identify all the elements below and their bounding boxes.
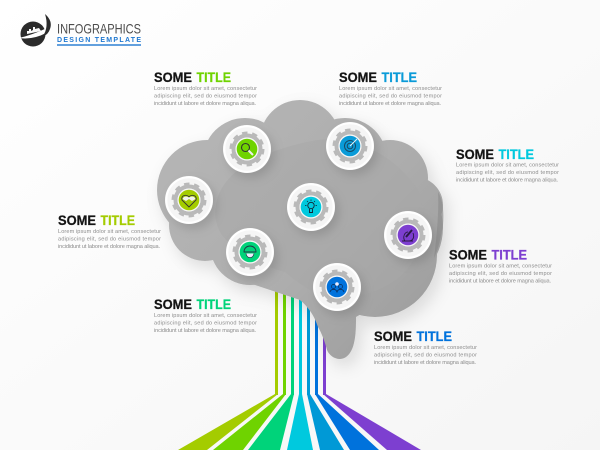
text block: bottom right: adipiscing elit, sed do eiusmod tempor xyxy=(374,352,477,358)
coloured stripes trunk xyxy=(178,285,421,450)
text block: left xyxy=(58,212,161,250)
text block: bottom left: adipiscing elit, sed do eiusmod tempor xyxy=(154,320,257,326)
text block: right lower: incididunt ut labore et dolore magna aliqua. xyxy=(449,278,551,284)
logo xyxy=(19,14,141,46)
node: target xyxy=(326,122,374,170)
brain right edge shade xyxy=(434,192,443,258)
text block: right upper: incididunt ut labore et dolore magna aliqua. xyxy=(456,178,558,184)
text block: top left: TITLE xyxy=(196,69,231,85)
text block: bottom right: Lorem ipsum dolor sit amet, consectetur xyxy=(374,345,477,351)
text block: right lower: TITLE xyxy=(492,246,527,262)
text block: top left xyxy=(154,69,257,107)
text block: left: incididunt ut labore et dolore magna aliqua. xyxy=(58,244,160,250)
text block: bottom right: TITLE xyxy=(416,328,452,344)
node: search xyxy=(223,125,271,173)
text block: top right: adipiscing elit, sed do eiusmod tempor xyxy=(339,94,442,100)
text block: right upper: Lorem ipsum dolor sit amet, consectetur xyxy=(456,162,559,168)
brain inner shaded lobe xyxy=(215,139,424,300)
node: microscope xyxy=(384,211,432,259)
logo heading: INFOGRAPHICS xyxy=(57,20,141,36)
text block: bottom left: Lorem ipsum dolor sit amet, consectetur xyxy=(154,313,257,319)
text block: top left: SOME xyxy=(154,69,192,85)
text block: top left: Lorem ipsum dolor sit amet, consectetur xyxy=(154,86,257,92)
text block: left: adipiscing elit, sed do eiusmod tempor xyxy=(58,236,161,242)
node: helmet xyxy=(226,228,274,276)
text block: top right xyxy=(339,69,442,107)
text block: bottom right: SOME xyxy=(374,328,412,344)
text block: top right: incididunt ut labore et dolore magna aliqua. xyxy=(339,101,441,107)
text block: left: TITLE xyxy=(100,212,135,228)
text block: right upper: adipiscing elit, sed do eiusmod tempor xyxy=(456,170,559,176)
text block: right lower xyxy=(449,246,552,284)
text block: bottom left xyxy=(154,296,257,334)
node: team xyxy=(313,263,361,311)
text block: bottom right xyxy=(374,328,477,366)
brain shape xyxy=(157,100,443,359)
text block: right lower: SOME xyxy=(449,246,487,262)
text block: right upper xyxy=(456,146,559,184)
text block: top left: incididunt ut labore et dolore magna aliqua. xyxy=(154,101,256,107)
node: heart xyxy=(165,176,213,224)
text block: bottom right: incididunt ut labore et dolore magna aliqua. xyxy=(374,360,476,366)
text block: right upper: SOME xyxy=(456,146,494,162)
text block: top right: SOME xyxy=(339,69,377,85)
text block: right upper: TITLE xyxy=(498,146,534,162)
text block: right lower: Lorem ipsum dolor sit amet, consectetur xyxy=(449,264,552,270)
text block: left: SOME xyxy=(58,212,96,228)
text block: right lower: adipiscing elit, sed do eiusmod tempor xyxy=(449,271,552,277)
text block: bottom left: SOME xyxy=(154,296,192,312)
text block: bottom left: TITLE xyxy=(196,296,231,312)
text block: bottom left: incididunt ut labore et dolore magna aliqua. xyxy=(154,328,256,334)
text block: top right: Lorem ipsum dolor sit amet, consectetur xyxy=(339,86,442,92)
logo subheading: DESIGN TEMPLATE xyxy=(57,37,141,44)
text block: top left: adipiscing elit, sed do eiusmod tempor xyxy=(154,94,257,100)
icon: logo emblem xyxy=(19,14,51,46)
text block: left: Lorem ipsum dolor sit amet, consectetur xyxy=(58,229,161,235)
text block: top right: TITLE xyxy=(382,69,417,85)
node: lightbulb xyxy=(287,183,335,231)
